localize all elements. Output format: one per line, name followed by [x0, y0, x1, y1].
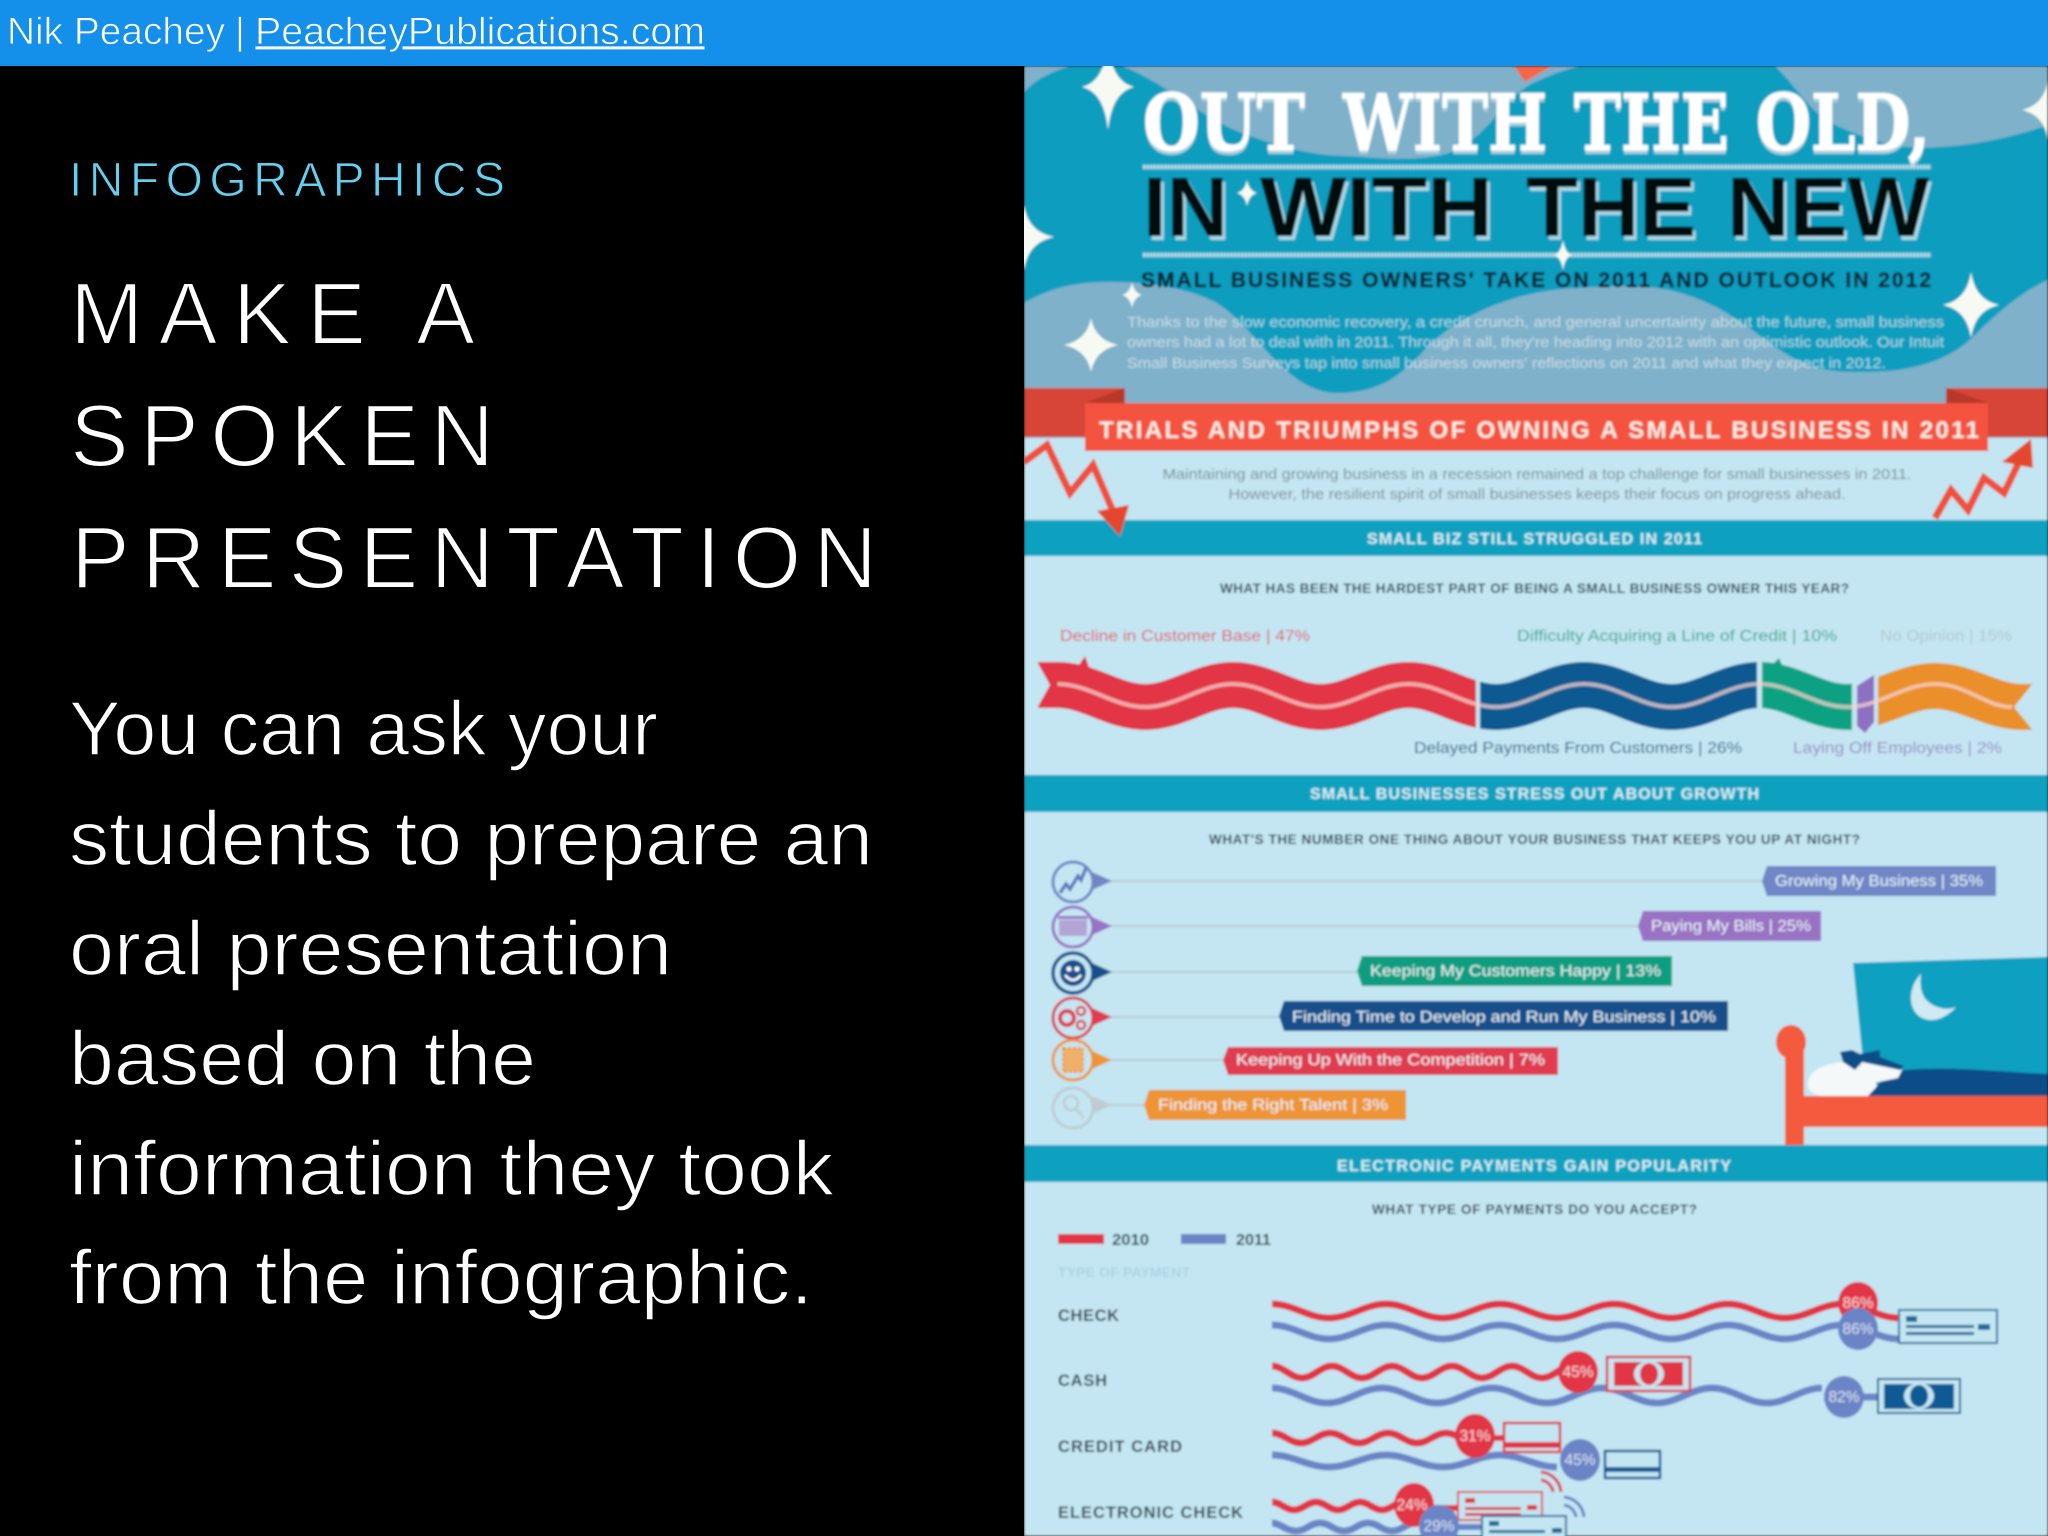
row labels — [1058, 1307, 1243, 1522]
row labels: ELECTRONIC CHECK — [1058, 1504, 1243, 1522]
bar row: growing: Growing My Business | 35% — [1775, 873, 1983, 890]
title line 1: WITH — [1342, 78, 1547, 169]
header text: Nik Peachey — [7, 11, 225, 53]
title line 1: WITH — [1342, 82, 1547, 173]
payment row: credit card: 31% — [1459, 1428, 1491, 1445]
bar row: time: Finding Time to Develop and Run My Business | 10% — [1292, 1009, 1716, 1026]
payment row: cash: 82% — [1828, 1389, 1860, 1406]
ribbon chart labels: Laying Off Employees | 2% — [1793, 740, 2002, 757]
header text: | — [235, 11, 245, 53]
title line 1: OLD, — [1756, 82, 1930, 173]
question 1: WHAT HAS BEEN THE HARDEST PART OF BEING A SMALL BUSINESS OWNER THIS YEAR? — [1220, 581, 1849, 596]
ribbon chart labels: Decline in Customer Base | 47% — [1060, 628, 1310, 645]
ribbon chart labels: No Opinion | 15% — [1880, 628, 2012, 645]
title line 2: NEW — [1727, 160, 1930, 254]
question 3: WHAT TYPE OF PAYMENTS DO YOU ACCEPT? — [1372, 1202, 1697, 1217]
main title: SPOKEN — [70, 386, 494, 485]
payment row: cash: 45% — [1562, 1364, 1594, 1381]
section bar 3 — [1024, 1145, 2048, 1182]
payment row: check: 86% — [1842, 1295, 1874, 1312]
legend: 2011 — [1236, 1232, 1271, 1249]
title line 2: WITH — [1260, 160, 1493, 254]
ribbon intro text: However, the resilient spirit of small businesses keeps their focus on progress ahead. — [1228, 486, 1846, 503]
intro paragraph: owners had a lot to deal with in 2011. Through it all, they're heading into 2012 with an optimistic outlook. Our Intuit — [1127, 334, 1945, 351]
body text — [69, 686, 873, 1321]
payment row: cash — [1272, 1351, 1960, 1418]
dotted rule — [1143, 165, 1931, 169]
ribbon chart labels — [1060, 628, 2012, 757]
icon: orange pennant at top — [1514, 66, 1552, 82]
payment row: credit card: 45% — [1564, 1452, 1596, 1469]
bar row: growing — [1053, 862, 1996, 902]
icon: stars — [1000, 44, 2048, 372]
title line 1: THE — [1574, 82, 1729, 173]
body text: oral presentation — [69, 906, 672, 992]
title line 1: OLD, — [1756, 78, 1930, 169]
title line 2: IN — [1143, 160, 1228, 254]
payment row: check: 86% — [1842, 1321, 1874, 1338]
header text — [7, 11, 705, 53]
section bar 1 — [1024, 520, 2048, 556]
ribbon chart labels: Delayed Payments From Customers | 26% — [1414, 740, 1742, 757]
title line 2: NEW — [1730, 164, 1933, 258]
payment row: electronic check: 24% — [1396, 1497, 1428, 1514]
bar row: customers — [1053, 953, 1672, 993]
legend: 2010 — [1112, 1232, 1149, 1249]
title line 1: OUT — [1143, 78, 1305, 169]
section bar 2: SMALL BUSINESSES STRESS OUT ABOUT GROWTH — [1310, 786, 1759, 803]
legend — [1056, 1232, 1272, 1246]
row labels: CHECK — [1058, 1307, 1119, 1325]
section bar 1: SMALL BIZ STILL STRUGGLED IN 2011 — [1367, 531, 1702, 548]
dotted rule — [1143, 253, 1931, 257]
panel: infographic — [1000, 44, 2048, 1536]
intro paragraph — [1127, 314, 1945, 372]
bar row: bills — [1053, 907, 1821, 947]
payment row: check — [1272, 1282, 1997, 1350]
red ribbon banner — [1024, 388, 2048, 451]
bar row: talent — [1053, 1088, 1406, 1128]
title line 1: OUT — [1143, 82, 1305, 173]
ribbon heading: TRIALS AND TRIUMPHS OF OWNING A SMALL BUSINESS IN 2011 — [1099, 417, 1979, 444]
title line 2: THE — [1526, 160, 1696, 254]
body text: students to prepare an — [69, 796, 873, 882]
section bar 2 — [1024, 775, 2048, 812]
body text: You can ask your — [69, 686, 658, 772]
bar row: competition — [1053, 1040, 1558, 1080]
bar row: competition: Keeping Up With the Competition | 7% — [1236, 1052, 1545, 1069]
title line 1: THE — [1574, 78, 1729, 169]
ribbon chart — [1036, 656, 2034, 733]
type of payment label: TYPE OF PAYMENT — [1058, 1264, 1190, 1280]
bar row: time — [1053, 998, 1728, 1038]
ribbon intro text — [1162, 466, 1912, 503]
title line 1 — [1142, 89, 1926, 168]
bar row: customers: Keeping My Customers Happy | 13% — [1370, 963, 1661, 980]
main title — [70, 264, 877, 607]
hero background with waves — [1024, 66, 2048, 438]
arrow: up zigzag — [1935, 439, 2033, 518]
ribbon chart labels: Difficulty Acquiring a Line of Credit | 10% — [1517, 628, 1837, 645]
ribbon intro text: Maintaining and growing business in a recession remained a top challenge for small businesses in 2011. — [1162, 466, 1912, 483]
bar row: talent: Finding the Right Talent | 3% — [1158, 1097, 1388, 1114]
header text: PeacheyPublications.com — [255, 11, 705, 53]
header bar — [0, 0, 2048, 66]
title line 2: IN — [1146, 164, 1231, 258]
section bar 3: ELECTRONIC PAYMENTS GAIN POPULARITY — [1337, 1158, 1731, 1175]
title line 2 — [1147, 176, 1934, 242]
eyebrow heading: INFOGRAPHICS — [69, 154, 505, 207]
bar row: bills: Paying My Bills | 25% — [1651, 918, 1811, 935]
subtitle: SMALL BUSINESS OWNERS' TAKE ON 2011 AND OUTLOOK IN 2012 — [1141, 269, 1931, 292]
panel: left text — [69, 154, 877, 1321]
main title: MAKE A — [70, 264, 475, 363]
body text: based on the — [69, 1016, 536, 1102]
illustration: bed at night — [1776, 957, 2048, 1145]
payment row: electronic check — [1272, 1472, 1584, 1536]
body text: information they took — [69, 1126, 835, 1212]
title line 2: WITH — [1263, 164, 1496, 258]
main title: PRESENTATION — [71, 508, 877, 607]
intro paragraph: Small Business Surveys tap into small business owners' reflections on 2011 and what they expect in 2012. — [1127, 355, 1886, 372]
payment row: credit card — [1272, 1414, 1660, 1481]
intro paragraph: Thanks to the slow economic recovery, a credit crunch, and general uncertainty about the future, small business — [1127, 314, 1944, 331]
title line 2: THE — [1529, 164, 1699, 258]
question 2: WHAT'S THE NUMBER ONE THING ABOUT YOUR BUSINESS THAT KEEPS YOU UP AT NIGHT? — [1209, 832, 1860, 847]
arrow: down zigzag — [1024, 445, 1129, 536]
row labels: CASH — [1058, 1372, 1107, 1390]
row labels: CREDIT CARD — [1058, 1438, 1182, 1456]
payment row: electronic check: 29% — [1423, 1518, 1455, 1535]
body text: from the infographic. — [69, 1235, 813, 1321]
